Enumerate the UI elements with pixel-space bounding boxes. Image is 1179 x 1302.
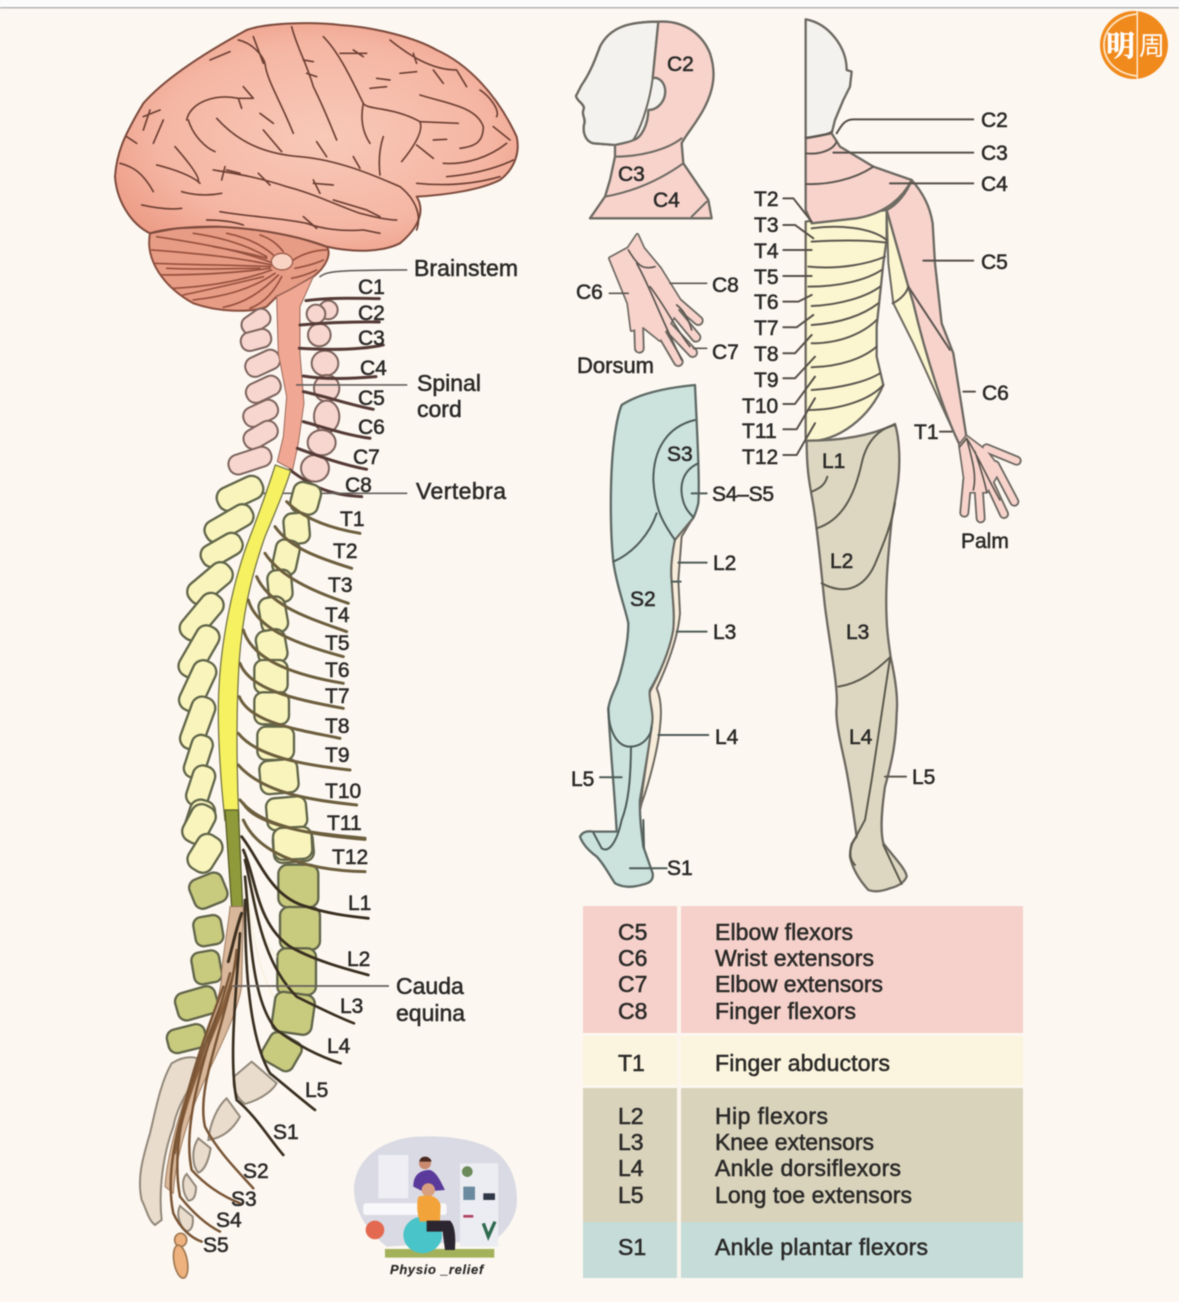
- brain sulci: [120, 27, 513, 233]
- spine level labels: T8: [325, 715, 350, 738]
- spine level labels: L2: [347, 948, 370, 971]
- badge: Ming Zhou logo: 明: [1106, 30, 1135, 63]
- cervical vertebrae back: [301, 301, 339, 482]
- hand labels: C7: [712, 341, 739, 364]
- head side view: [576, 22, 714, 218]
- spine level labels: C4: [360, 357, 387, 380]
- hand labels: [576, 274, 739, 378]
- leg labels: L3: [713, 621, 736, 644]
- outer arm: [887, 180, 967, 447]
- hand outline layer: [610, 235, 698, 362]
- back body labels: T5: [754, 266, 779, 289]
- row: lower limb (tan): L5: [618, 1182, 644, 1208]
- spine anatomy labels: [396, 255, 518, 1026]
- dermatome lines: [806, 132, 950, 410]
- leg labels: S1: [667, 857, 693, 880]
- posterior leg (teal sacral zone): [580, 385, 708, 887]
- back body labels: T11: [742, 420, 777, 443]
- spine level labels: T1: [340, 508, 365, 531]
- row: lower limb (tan): [583, 1088, 1023, 1222]
- back body lower: leg and palm: [807, 424, 1017, 891]
- inner arm strip: [887, 210, 967, 447]
- row: upper limb (pink): C6: [618, 945, 647, 971]
- row: upper limb (pink): Wrist extensors: [715, 945, 874, 971]
- cerebrum: [115, 23, 518, 251]
- hand labels: Dorsum: [577, 353, 654, 378]
- row: upper limb (pink): Elbow flexors: [715, 919, 853, 945]
- row: upper limb (pink): [583, 906, 1023, 1033]
- hand labels: C6: [576, 281, 603, 304]
- leg labels: S3: [667, 443, 693, 466]
- spine level labels: C1: [358, 276, 385, 299]
- spine level labels: S2: [243, 1160, 269, 1183]
- back body labels: C6: [982, 382, 1009, 405]
- row: S1 (teal): S1: [618, 1234, 646, 1260]
- row: lower limb (tan): L4: [618, 1155, 644, 1181]
- palm fill layer: [960, 437, 1017, 518]
- back body labels: T4: [754, 240, 779, 263]
- back body labels: [742, 109, 1009, 789]
- lumbar vertebrae: [165, 865, 320, 1074]
- spine level labels: T5: [325, 632, 350, 655]
- back body labels: C2: [981, 109, 1008, 132]
- torso: [806, 210, 887, 442]
- olive conus and cauda equina: [225, 810, 243, 907]
- leg labels: L5: [571, 768, 594, 791]
- spine level labels: C6: [358, 416, 385, 439]
- back body labels: L5: [912, 766, 935, 789]
- thoracic spine: [175, 465, 365, 864]
- back body labels: L2: [830, 550, 853, 573]
- cervical vertebrae front: [226, 305, 284, 477]
- row: upper limb (pink): C8: [618, 998, 647, 1024]
- thoracic vertebrae back: [254, 480, 323, 864]
- row: T1 (cream): T1: [618, 1050, 645, 1076]
- back body labels: T3: [754, 214, 779, 237]
- spine level labels: L4: [327, 1035, 351, 1058]
- head half: [806, 19, 852, 138]
- row: lower limb (tan): Knee extensors: [715, 1129, 874, 1155]
- spine level labels: T6: [325, 659, 350, 682]
- row: upper limb (pink): C7: [618, 971, 647, 997]
- spine anatomy labels: Cauda: [396, 973, 464, 999]
- head labels: C2: [667, 53, 694, 76]
- badge: Ming Zhou logo: 周: [1139, 31, 1165, 61]
- badge: Ming Zhou logo: [1100, 11, 1168, 79]
- row: lower limb (tan): L3: [618, 1129, 644, 1155]
- row: lower limb (tan): Long toe extensors: [715, 1182, 912, 1208]
- row: upper limb (pink): C5: [618, 919, 647, 945]
- pink spinal cord: [277, 277, 313, 470]
- leader line: cauda equina: [233, 983, 388, 988]
- brain: [115, 23, 518, 311]
- tan leg: [807, 424, 907, 891]
- sacrum: [140, 1057, 277, 1231]
- spine level labels: T10: [325, 780, 361, 803]
- back body labels: T12: [742, 446, 778, 469]
- neck and shoulder: [806, 133, 912, 223]
- palm outline layer: [960, 437, 1017, 518]
- back body labels: C5: [981, 251, 1008, 274]
- spine level labels: T2: [333, 540, 358, 563]
- back body labels: T6: [754, 291, 779, 314]
- back body labels: T8: [754, 343, 779, 366]
- cervical nerves: [290, 298, 383, 497]
- spine level labels: T3: [328, 574, 353, 597]
- spine level labels: S5: [203, 1234, 229, 1257]
- row: lower limb (tan): Hip flexors: [715, 1103, 828, 1129]
- hand fill layer: [610, 235, 698, 362]
- row: S1 (teal): Ankle plantar flexors: [715, 1234, 928, 1260]
- spine level labels: C3: [358, 327, 385, 350]
- lower spinal nerves: [243, 803, 365, 872]
- spine level labels: C5: [358, 387, 385, 410]
- back body labels: T2: [754, 188, 779, 211]
- row: T1 (cream): Finger abductors: [715, 1050, 890, 1076]
- leg labels: S2: [630, 588, 656, 611]
- logo ball: [403, 1217, 442, 1253]
- leg labels: S4–S5: [712, 483, 774, 506]
- spine level labels: [203, 276, 387, 1257]
- spine level labels: L1: [348, 892, 371, 915]
- head labels: [618, 53, 694, 212]
- leg labels: L4: [715, 726, 739, 749]
- spine anatomy labels: cord: [417, 396, 462, 422]
- logo shelf objects: [366, 1166, 495, 1239]
- back body labels: T10: [742, 395, 778, 418]
- row: lower limb (tan): Ankle dorsiflexors: [715, 1155, 901, 1181]
- spine level labels: S1: [273, 1121, 299, 1144]
- spine anatomy labels: Spinal: [417, 370, 481, 396]
- spine level labels: S4: [216, 1209, 242, 1232]
- back body labels: Palm: [961, 530, 1009, 553]
- back body labels: L3: [846, 621, 869, 644]
- back body labels: T9: [754, 369, 779, 392]
- thoracic nerves: [238, 502, 365, 838]
- spine anatomy labels: Brainstem: [414, 255, 518, 281]
- dorsum of hand: [609, 235, 707, 362]
- back body upper: head, shoulder, arm, torso: [783, 19, 975, 455]
- back body labels: C4: [981, 173, 1008, 196]
- spine level labels: S3: [231, 1188, 257, 1211]
- spine level labels: L3: [340, 995, 363, 1018]
- coccyx: [171, 1233, 190, 1279]
- myotome table: [583, 906, 1023, 1278]
- head labels: C3: [618, 163, 645, 186]
- row: T1 (cream): [583, 1036, 1023, 1085]
- row: upper limb (pink): Elbow extensors: [715, 971, 883, 997]
- cervical vertebrae and spinal cord: [226, 270, 407, 497]
- spine level labels: T12: [332, 846, 368, 869]
- leg labels: L2: [713, 552, 736, 575]
- logo background room: [354, 1136, 517, 1247]
- spine level labels: C8: [345, 474, 372, 497]
- hand labels: C8: [712, 274, 739, 297]
- cerebellum: [149, 225, 329, 311]
- row: S1 (teal): [583, 1222, 1023, 1278]
- logo caption: Physio _relief: [390, 1262, 485, 1277]
- row: upper limb (pink): Finger flexors: [715, 998, 856, 1024]
- spine anatomy labels: equina: [396, 1000, 465, 1026]
- head labels: C4: [653, 189, 680, 212]
- back body labels: L1: [822, 450, 845, 473]
- back body labels: T1: [914, 421, 939, 444]
- spine level labels: T11: [327, 812, 362, 835]
- logo floor: [385, 1249, 494, 1258]
- spine anatomy labels: Vertebra: [416, 478, 506, 504]
- leader lines: brainstem, spinal cord, vertebra: [231, 270, 407, 493]
- yellow spinal cord: [218, 465, 291, 821]
- back body labels: L4: [849, 726, 873, 749]
- row: lower limb (tan): L2: [618, 1103, 644, 1129]
- lower thoracic vertebrae: [178, 800, 313, 877]
- leg labels: [571, 443, 774, 880]
- lumbar and sacral spine: [140, 800, 388, 1279]
- logo figures: [413, 1157, 455, 1250]
- Physio relief logo: [354, 1136, 517, 1277]
- back body labels: T7: [754, 317, 779, 340]
- spine level labels: L5: [305, 1079, 328, 1102]
- spine level labels: C2: [358, 302, 385, 325]
- thoracic vertebrae front: [175, 472, 267, 846]
- leader lines: [783, 119, 975, 455]
- back body labels: C3: [981, 142, 1008, 165]
- spine level labels: C7: [353, 446, 380, 469]
- spine level labels: T9: [325, 744, 350, 767]
- spine level labels: T4: [325, 604, 350, 627]
- spine level labels: T7: [325, 685, 350, 708]
